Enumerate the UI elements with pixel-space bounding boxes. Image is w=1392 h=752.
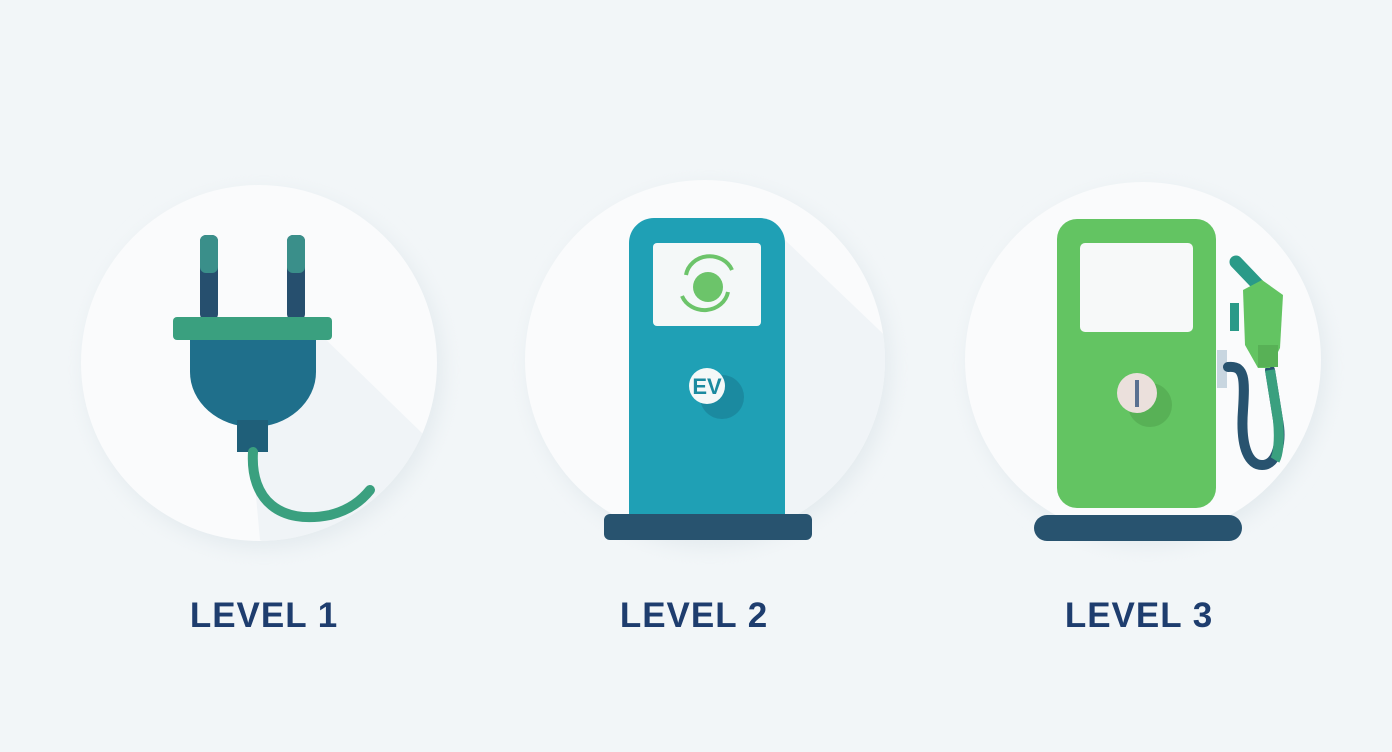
panel: level 3 — [965, 182, 1326, 635]
panel: level 2 — [591, 218, 888, 627]
panel: level 1 — [142, 235, 440, 627]
label: level 2: LEVEL 2 — [620, 596, 768, 635]
label: level 3: LEVEL 3 — [1065, 596, 1213, 635]
background circle 1 — [81, 185, 437, 541]
icon: plug — [173, 235, 422, 540]
background circle 3 — [965, 182, 1321, 538]
icon: fast charger pump — [1034, 219, 1283, 541]
icon: charging station: EV — [692, 374, 722, 399]
label: level 1: LEVEL 1 — [190, 596, 338, 635]
icon: charging station — [604, 218, 885, 540]
background circle 2 — [525, 180, 885, 540]
